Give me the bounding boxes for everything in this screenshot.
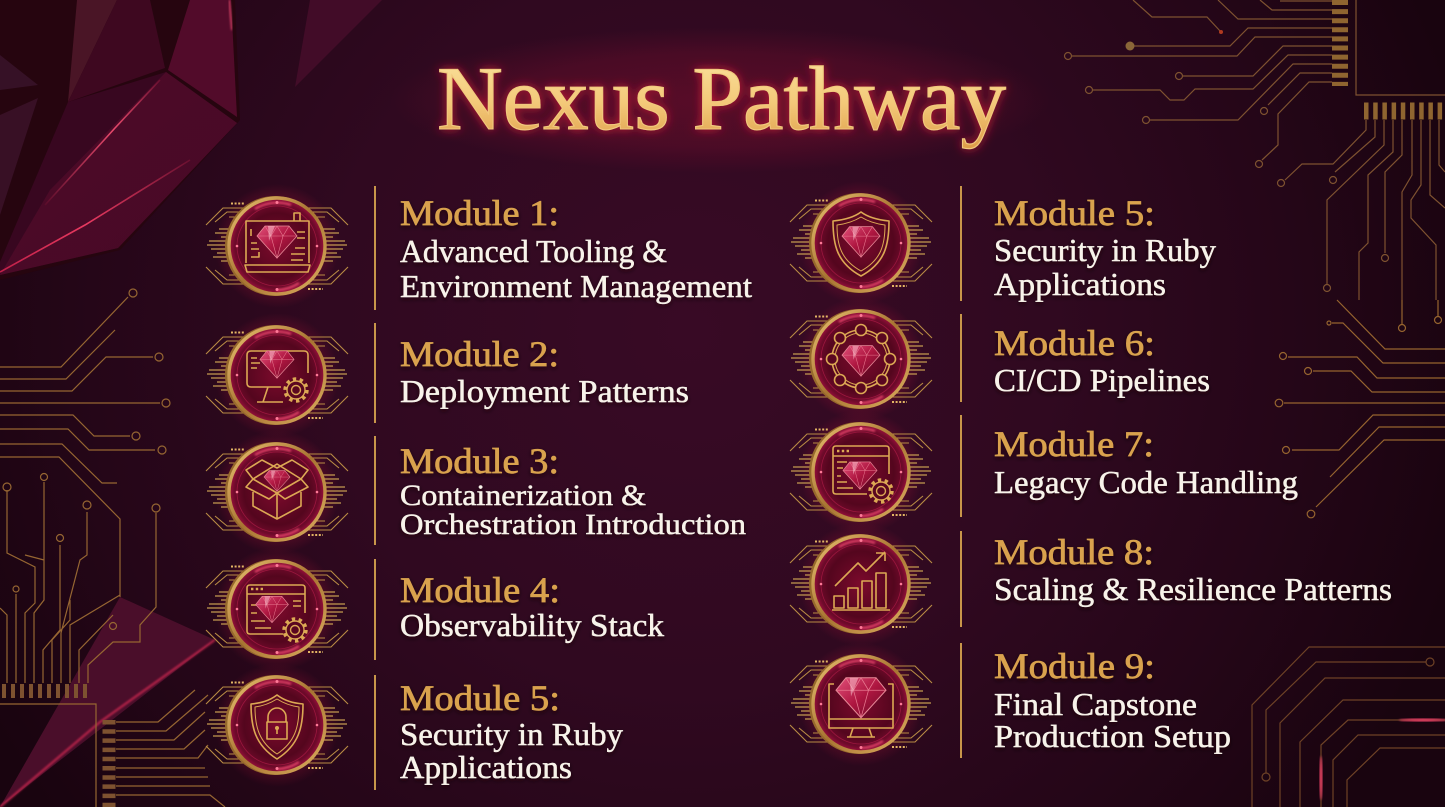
module 8, right column — [790, 522, 1392, 646]
module 8 name: Scaling & Resilience Patterns — [994, 571, 1392, 607]
module 5 name — [994, 232, 1216, 302]
left chip pads — [2, 691, 109, 807]
icon: browser window with gear — [790, 410, 932, 534]
module 1 name: Environment Management — [400, 268, 752, 304]
module 5 label: Module 5: — [400, 678, 560, 718]
divider — [374, 436, 376, 545]
module 2 label: Module 2: — [400, 334, 559, 374]
icon: ring of nodes with ruby — [790, 297, 932, 421]
icon: shield with padlock — [206, 663, 348, 787]
module 9 label: Module 9: — [994, 646, 1155, 686]
module 7 label: Module 7: — [994, 424, 1154, 464]
module 3 name — [400, 480, 746, 541]
module 4 name: Observability Stack — [400, 607, 664, 643]
icon: browser window with gear — [206, 547, 348, 671]
module 1, left column — [206, 184, 752, 310]
divider — [374, 323, 376, 423]
module 9, right column — [790, 642, 1231, 766]
module 2, left column — [206, 313, 689, 437]
bottom-right circuit traces — [1252, 647, 1445, 807]
divider — [960, 531, 962, 627]
title — [390, 27, 1050, 173]
module 5, right column — [790, 181, 1216, 305]
divider — [960, 415, 962, 517]
divider — [374, 559, 376, 660]
divider — [960, 314, 962, 402]
module 6 name: CI/CD Pipelines — [994, 362, 1210, 398]
bottom-left crystal shard — [0, 597, 215, 807]
module 7, right column — [790, 410, 1298, 534]
module 3 name: Orchestration Introduction — [400, 509, 746, 541]
module 1 name — [400, 233, 752, 304]
icon: rising bar chart — [790, 522, 932, 646]
module 7 name: Legacy Code Handling — [994, 464, 1298, 500]
module 9 name: Final Capstone — [994, 686, 1197, 722]
module 5, left column — [206, 663, 623, 790]
module 3 name: Containerization & — [400, 480, 646, 512]
module 6 label: Module 6: — [994, 323, 1155, 363]
divider — [960, 643, 962, 758]
left circuit traces — [0, 289, 225, 807]
module 5 label: Module 5: — [994, 193, 1155, 233]
module 3 label: Module 3: — [400, 441, 559, 481]
module 1 label: Module 1: — [400, 193, 559, 233]
module 2 name: Deployment Patterns — [400, 373, 689, 409]
module 4, left column — [206, 547, 664, 671]
module 6, right column — [790, 297, 1210, 421]
icon: monitor with gear — [206, 313, 348, 437]
divider — [960, 186, 962, 301]
icon: monitor with large ruby — [790, 642, 932, 766]
icon: open box with ruby — [206, 430, 348, 554]
title: Nexus Pathway — [437, 48, 1006, 149]
module 5 name — [400, 716, 623, 785]
module 5 name: Security in Ruby — [994, 232, 1216, 268]
right-middle circuit traces — [1275, 300, 1445, 518]
module 5 name: Security in Ruby — [400, 716, 623, 752]
module 5 name: Applications — [400, 749, 572, 785]
divider — [374, 186, 376, 310]
icon: shield with ruby — [790, 181, 932, 305]
module 9 name: Production Setup — [994, 718, 1231, 754]
top-left crystal shards — [0, 0, 382, 280]
module 3, left column — [206, 430, 746, 554]
top-right chip and traces — [1064, 0, 1445, 300]
icon: laptop with ruby — [206, 184, 348, 308]
module 5 name: Applications — [994, 266, 1166, 302]
divider — [374, 675, 376, 790]
module 4 label: Module 4: — [400, 570, 560, 610]
module 1 name: Advanced Tooling & — [400, 233, 667, 269]
module 8 label: Module 8: — [994, 532, 1154, 572]
module 9 name — [994, 686, 1231, 754]
